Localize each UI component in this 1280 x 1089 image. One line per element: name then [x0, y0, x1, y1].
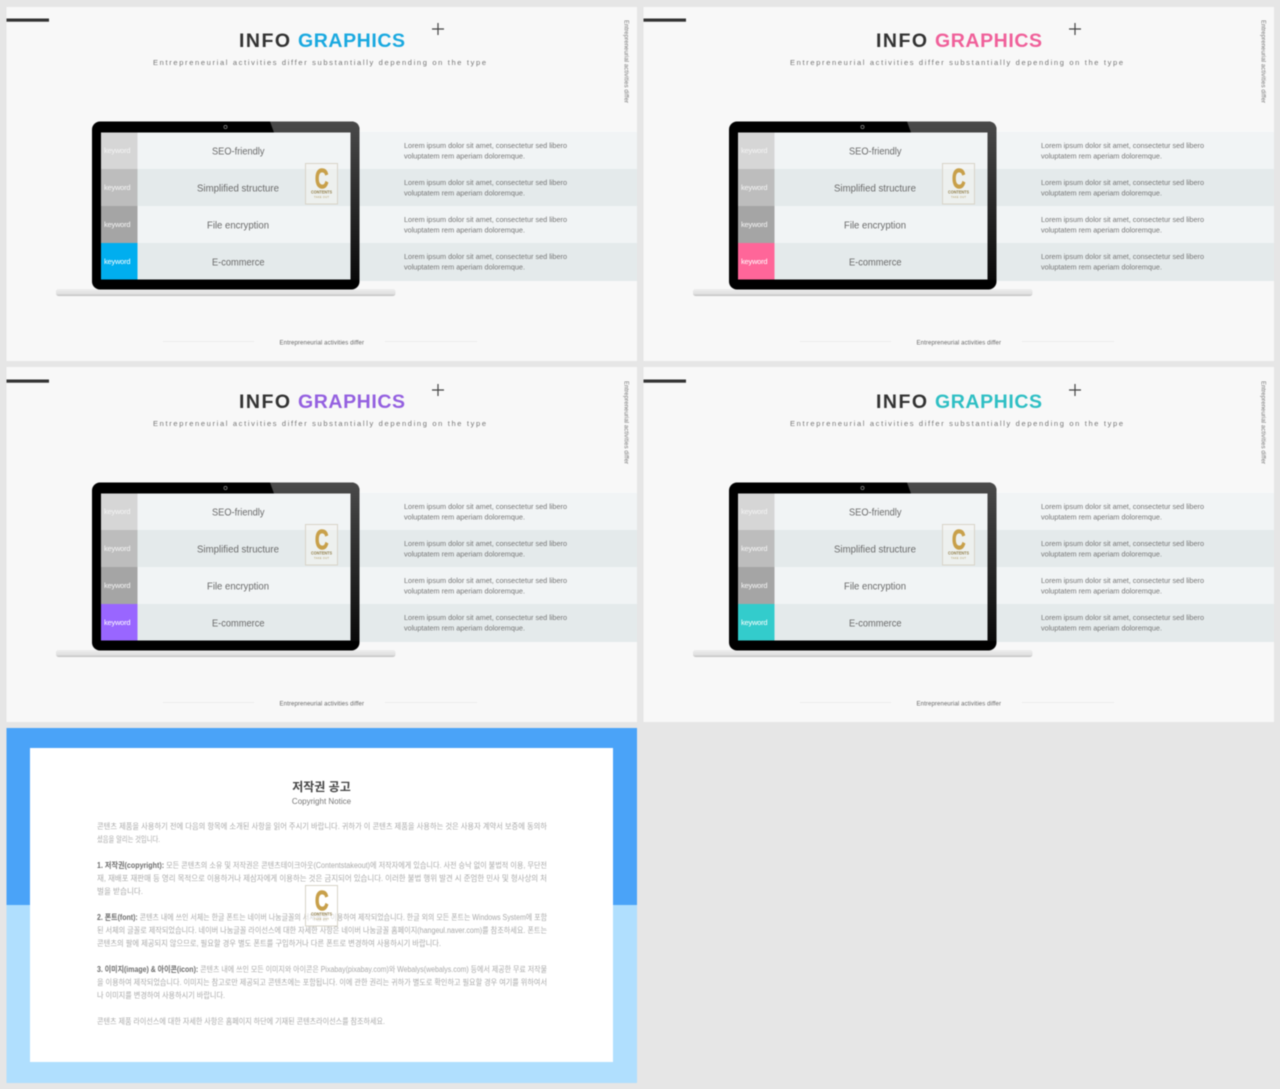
laptop: keyword [104, 183, 130, 192]
descriptions: voluptatem rem aperiam doloremque. [1041, 152, 1162, 160]
logo: TAKE OUT [314, 556, 329, 560]
description bands [359, 132, 637, 281]
closing line: 콘텐츠 제품 라이선스에 대한 자세한 사항은 홈페이지 하단에 기재된 콘텐츠라이선스를 참조하세요. [97, 1016, 385, 1026]
title: INFO [876, 391, 927, 413]
subtitle: Entrepreneurial activities differ substantially depending on the type [153, 419, 486, 428]
section 3: image and icon [97, 964, 547, 1000]
intro paragraph: 셨음을 알리는 것입니다. [97, 834, 160, 844]
section 3: image and icon: 3. 이미지(image) & 아이콘(icon): 콘텐츠 내에 쓰인 모든 이미지와 아이콘은 Pixabay(pixabay.com)와 Webalys(webalys.com) 등에서 제공한 무료 저작물 [97, 964, 547, 974]
icon: plus [432, 384, 444, 396]
descriptions: Lorem ipsum dolor sit amet, consectetur sed libero [1041, 539, 1204, 548]
panel: copyright notice [6, 728, 637, 1083]
section 3: image and icon: 나 이미지를 변경하여 사용하시기 바랍니다. [97, 990, 225, 1000]
descriptions: voluptatem rem aperiam doloremque. [404, 550, 525, 558]
descriptions [1041, 141, 1204, 272]
logo [306, 885, 338, 926]
vertical caption: Entrepreneurial activities differ [622, 381, 628, 464]
descriptions [404, 141, 567, 272]
section 1: copyright: 재, 재배포 재판매 등 영리 목적으로 이용하거나 제삼자에게 이용하는 것은 금지되어 있습니다. 이러한 불법 행위 발견 시 준엄한 민사 및 형사상의 처 [97, 873, 547, 883]
logo: C [952, 163, 966, 194]
descriptions: voluptatem rem aperiam doloremque. [1041, 226, 1162, 234]
descriptions: voluptatem rem aperiam doloremque. [404, 188, 525, 198]
laptop: SEO-friendly [849, 146, 902, 158]
descriptions: voluptatem rem aperiam doloremque. [404, 586, 525, 596]
laptop: keyword [741, 618, 768, 627]
laptop: Simplified structure [197, 544, 279, 556]
section 1: copyright: 1. 저작권(copyright): 모든 콘텐츠의 소유 및 저작권은 콘텐츠테이크아웃(Contentstakeout)에 저작자에게 있습니다. 사전 승낙 없이 불법적 이용, 무단전 [97, 860, 547, 870]
laptop: SEO-friendly [212, 146, 265, 158]
laptop: keyword [741, 581, 768, 590]
laptop: keyword [104, 618, 130, 627]
descriptions: voluptatem rem aperiam doloremque. [1041, 188, 1162, 198]
subtitle: Entrepreneurial activities differ substantially depending on the type [153, 58, 486, 67]
title: GRAPHICS [298, 391, 405, 413]
section 2: font: 된 서체의 글꼴로 제작되었습니다. 네이버 나눔글꼴 라이선스에 대한 자세한 사항은 네이버 나눔글꼴 홈페이지(hangeul.naver.com)를 참조하세요. 폰트는 [97, 925, 547, 935]
footer: Entrepreneurial activities differ [280, 340, 364, 346]
panel: purple slide [6, 367, 637, 722]
descriptions: voluptatem rem aperiam doloremque. [1041, 512, 1162, 522]
logo: C [315, 885, 328, 916]
descriptions: voluptatem rem aperiam doloremque. [404, 512, 525, 522]
footer: Entrepreneurial activities differ [916, 702, 1001, 708]
descriptions: Lorem ipsum dolor sit amet, consectetur sed libero [1041, 215, 1204, 224]
section 2: font: 콘텐츠의 팔에 제공되지 않으므로, 필요할 경우 별도 폰트를 구입하거나 다른 폰트로 변경하여 사용하시기 바랍니다. [97, 938, 441, 948]
laptop: E-commerce [849, 256, 902, 268]
laptop: keyword [104, 220, 130, 229]
logo: TAKE OUT [951, 556, 966, 560]
icon: plus [432, 23, 444, 35]
descriptions: voluptatem rem aperiam doloremque. [1041, 262, 1162, 272]
logo: C [315, 163, 328, 194]
logo: CONTENTS [311, 550, 332, 556]
descriptions: Lorem ipsum dolor sit amet, consectetur sed libero [404, 215, 567, 224]
descriptions: voluptatem rem aperiam doloremque. [404, 262, 525, 272]
logo [942, 524, 974, 565]
descriptions [404, 502, 567, 632]
logo: CONTENTS [948, 190, 969, 194]
laptop: keyword [741, 507, 768, 516]
logo [306, 163, 338, 204]
logo: C [952, 524, 966, 555]
panel: blue slide [6, 7, 637, 361]
descriptions: Lorem ipsum dolor sit amet, consectetur sed libero [404, 178, 567, 187]
accent bar [6, 380, 49, 383]
panel: teal slide [644, 367, 1274, 722]
laptop: File encryption [844, 220, 906, 232]
description bands [996, 493, 1274, 642]
descriptions: Lorem ipsum dolor sit amet, consectetur sed libero [404, 252, 567, 261]
subtitle: Entrepreneurial activities differ substantially depending on the type [790, 419, 1123, 428]
title [876, 391, 1042, 413]
description bands [996, 132, 1274, 281]
title: GRAPHICS [935, 391, 1042, 413]
laptop [56, 482, 396, 657]
title: INFO [876, 30, 927, 52]
descriptions: voluptatem rem aperiam doloremque. [404, 226, 525, 234]
section 1: copyright: 벌을 받습니다. [97, 886, 143, 896]
laptop: keyword [741, 257, 768, 266]
descriptions: voluptatem rem aperiam doloremque. [1041, 586, 1162, 596]
icon: plus [1069, 23, 1081, 35]
descriptions: Lorem ipsum dolor sit amet, consectetur sed libero [404, 502, 567, 511]
laptop: keyword [741, 544, 768, 553]
laptop: Simplified structure [197, 182, 279, 194]
laptop [693, 122, 1032, 296]
laptop: keyword [104, 146, 130, 155]
logo: TAKE OUT [314, 195, 329, 199]
logo: CONTENTS [311, 190, 332, 194]
laptop: keyword [741, 220, 768, 229]
description bands [359, 493, 637, 642]
laptop: File encryption [207, 580, 269, 592]
laptop: File encryption [207, 220, 269, 232]
vertical caption: Entrepreneurial activities differ [1260, 381, 1266, 464]
descriptions: Lorem ipsum dolor sit amet, consectetur sed libero [1041, 576, 1204, 585]
descriptions: voluptatem rem aperiam doloremque. [1041, 550, 1162, 558]
laptop: E-commerce [849, 618, 902, 630]
laptop: keyword [104, 507, 130, 516]
section 1: copyright [97, 860, 547, 896]
laptop: Simplified structure [834, 544, 916, 556]
intro paragraph: 콘텐츠 제품을 사용하기 전에 다음의 항목에 소개된 사항을 읽어 주시기 바랍니다. 귀하가 이 콘텐츠 제품을 사용하는 것은 사용자 계약서 보증에 동의하 [97, 821, 548, 831]
laptop [693, 482, 1032, 657]
accent bar [644, 18, 686, 22]
laptop: keyword [741, 183, 768, 192]
notice heading: 저작권 공고 [292, 779, 351, 794]
title [239, 391, 405, 413]
title: INFO [239, 30, 290, 52]
section 3: image and icon: 을 이용하여 제작되었습니다. 이미지는 참고로만 제공되고 콘텐츠에는 포함됩니다. 이에 관한 권리는 귀하가 별도로 확인하고 필요할 경우 여기를 위하여서 [97, 977, 547, 987]
title [876, 30, 1042, 52]
icon: plus [1069, 384, 1081, 396]
laptop: SEO-friendly [212, 506, 265, 518]
title: GRAPHICS [935, 30, 1042, 52]
laptop: keyword [104, 544, 130, 553]
footer: Entrepreneurial activities differ [916, 340, 1001, 346]
descriptions: Lorem ipsum dolor sit amet, consectetur sed libero [1041, 141, 1204, 150]
descriptions: Lorem ipsum dolor sit amet, consectetur sed libero [1041, 252, 1204, 261]
accent bar [6, 18, 49, 22]
laptop: Simplified structure [834, 182, 916, 194]
logo: C [315, 524, 328, 555]
title: INFO [239, 391, 290, 413]
laptop: keyword [104, 257, 130, 266]
descriptions: Lorem ipsum dolor sit amet, consectetur sed libero [404, 141, 567, 150]
title [239, 30, 405, 52]
footer: Entrepreneurial activities differ [280, 702, 364, 708]
laptop: E-commerce [212, 256, 265, 268]
logo: CONTENTS [311, 912, 332, 916]
descriptions: Lorem ipsum dolor sit amet, consectetur sed libero [404, 613, 567, 622]
descriptions [1041, 502, 1204, 632]
logo: TAKE OUT [951, 195, 966, 199]
descriptions: Lorem ipsum dolor sit amet, consectetur sed libero [404, 539, 567, 548]
descriptions: Lorem ipsum dolor sit amet, consectetur sed libero [1041, 613, 1204, 622]
vertical caption: Entrepreneurial activities differ [1260, 20, 1266, 103]
laptop: SEO-friendly [849, 506, 902, 518]
laptop: E-commerce [212, 618, 265, 630]
laptop: File encryption [844, 580, 906, 592]
descriptions: Lorem ipsum dolor sit amet, consectetur sed libero [404, 576, 567, 585]
laptop [56, 122, 396, 296]
descriptions: voluptatem rem aperiam doloremque. [1041, 624, 1162, 632]
intro paragraph [97, 821, 548, 844]
panel: pink slide [644, 7, 1274, 361]
descriptions: voluptatem rem aperiam doloremque. [404, 624, 525, 632]
accent bar [644, 380, 686, 383]
descriptions: voluptatem rem aperiam doloremque. [404, 152, 525, 160]
notice subheading: Copyright Notice [292, 797, 352, 806]
section 2: font: 2. 폰트(font): 콘텐츠 내에 쓰인 서체는 한글 폰트는 네이버 나눔글꼴의 서체들을 이용하여 제작되었습니다. 한글 외의 모든 폰트는 Windows System에 포함 [97, 912, 548, 922]
logo [306, 524, 338, 565]
title: GRAPHICS [298, 30, 405, 52]
laptop: keyword [741, 146, 768, 155]
logo: CONTENTS [948, 550, 969, 556]
section 2: font [97, 912, 548, 948]
logo: TAKE OUT [314, 917, 329, 921]
vertical caption: Entrepreneurial activities differ [622, 20, 628, 103]
laptop: keyword [104, 581, 130, 590]
descriptions: Lorem ipsum dolor sit amet, consectetur sed libero [1041, 502, 1204, 511]
subtitle: Entrepreneurial activities differ substantially depending on the type [790, 58, 1123, 67]
logo [942, 163, 974, 204]
descriptions: Lorem ipsum dolor sit amet, consectetur sed libero [1041, 178, 1204, 187]
